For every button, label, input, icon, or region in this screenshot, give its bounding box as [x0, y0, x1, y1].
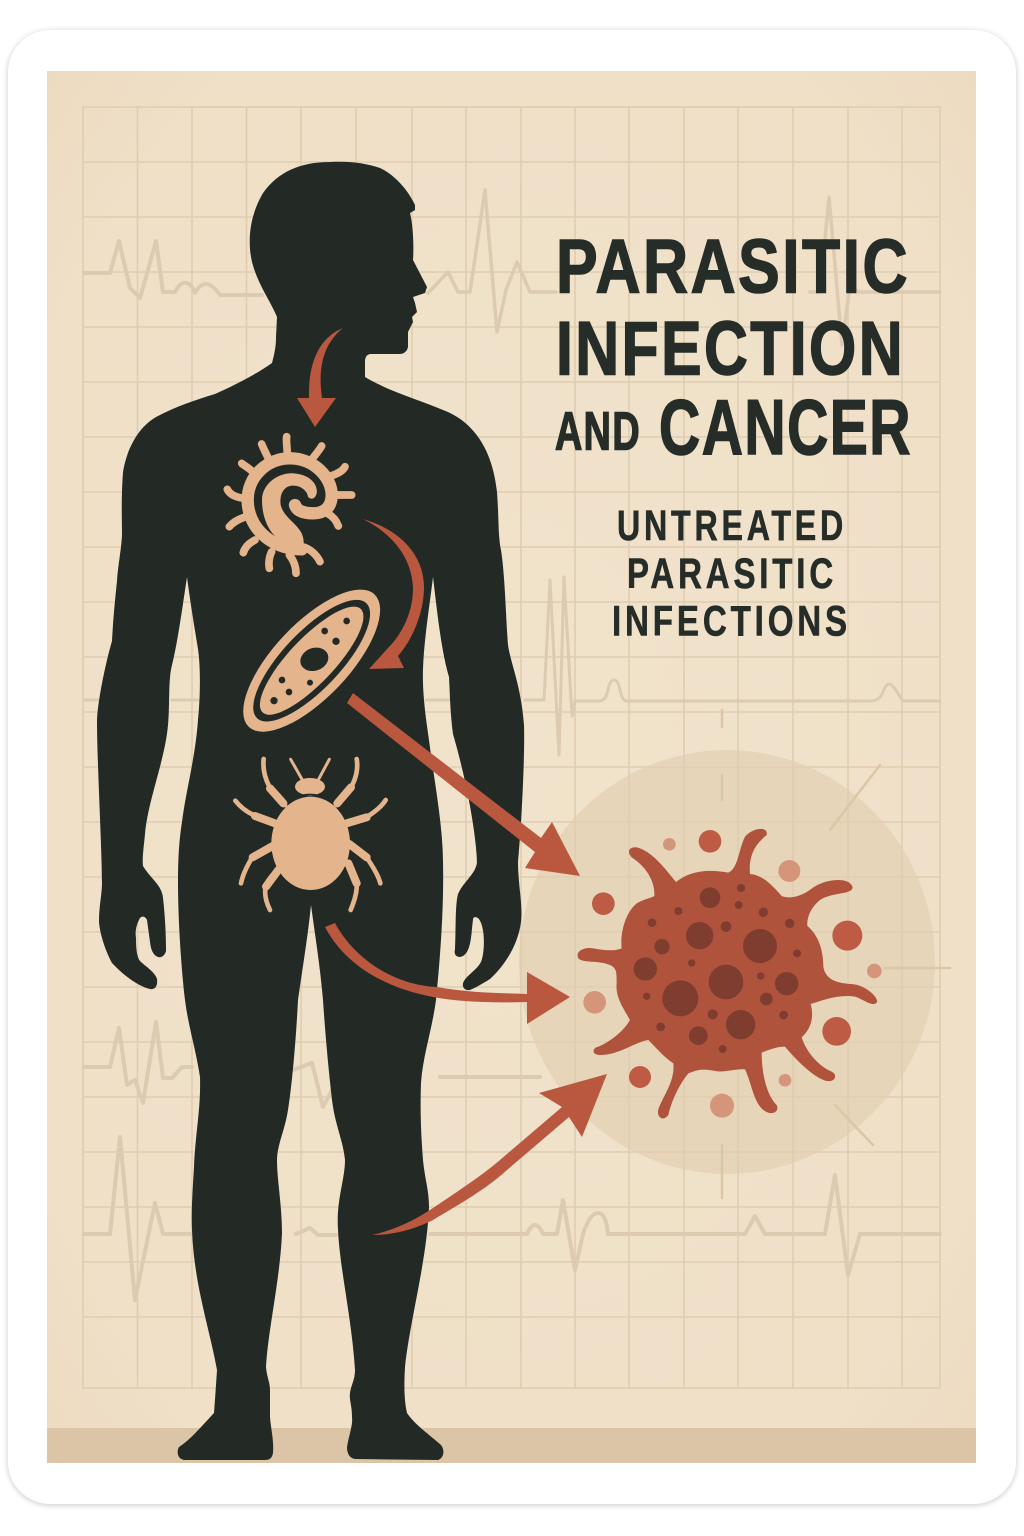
- title: AND: [555, 402, 641, 462]
- title: [555, 224, 912, 471]
- title: PARASITIC: [556, 224, 910, 310]
- tumour body: [578, 829, 877, 1118]
- satellite dots: [583, 830, 882, 1118]
- icon: tick-like parasite: [235, 759, 386, 910]
- subtitle: PARASITIC: [627, 550, 837, 598]
- title: INFECTION: [556, 306, 905, 392]
- subtitle: INFECTIONS: [612, 598, 851, 646]
- icon: oval protozoan parasite: [222, 569, 402, 753]
- subtitle: UNTREATED: [617, 502, 847, 550]
- icon: cancer cell with satellites: [578, 829, 882, 1118]
- tumour dark spots: [634, 884, 801, 1053]
- icon: spiral parasite: [227, 437, 352, 573]
- arrow: protozoan to tumour: [347, 693, 580, 876]
- subtitle: [612, 502, 851, 646]
- floor band: [47, 1428, 976, 1463]
- arrow: leg to tumour: [372, 1074, 607, 1235]
- ECG trace lines in the background: [84, 190, 950, 1300]
- body silhouette: [97, 162, 524, 1460]
- arrow: tick parasite to tumour: [325, 923, 570, 1024]
- title: CANCER: [659, 383, 912, 471]
- arrow: neck to chest: [297, 328, 343, 427]
- tumour halo circle: [519, 750, 935, 1174]
- arrow: curved from spiral parasite to protozoan: [363, 519, 424, 669]
